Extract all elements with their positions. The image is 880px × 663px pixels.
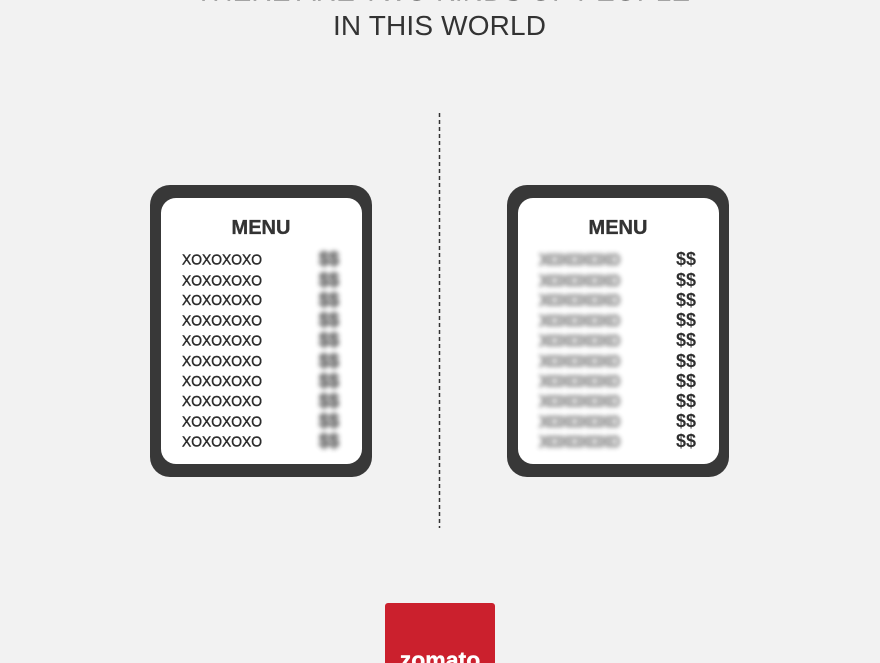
right menu prices: $$ — [676, 431, 696, 451]
right menu blurred items: XOXOXOXO — [540, 252, 620, 268]
left menu items: XOXOXOXO — [182, 393, 262, 410]
right menu blurred items: XOXOXOXO — [540, 292, 620, 309]
right menu blurred items: XOXOXOXO — [540, 353, 620, 370]
left menu blurred prices: $$ — [319, 270, 339, 290]
right menu blurred items: XOXOXOXO — [540, 332, 620, 350]
title: IN THIS WORLD — [333, 10, 546, 41]
left menu items: XOXOXOXO — [182, 312, 262, 330]
right menu blurred items: XOXOXOXO — [540, 373, 620, 390]
left menu items: XOXOXOXO — [182, 373, 262, 390]
left menu items: XOXOXOXO — [182, 414, 262, 430]
right menu prices: $$ — [676, 411, 696, 431]
right menu prices: $$ — [676, 290, 696, 310]
left menu blurred prices — [319, 249, 339, 451]
right menu prices: $$ — [676, 371, 696, 391]
left menu blurred prices: $$ — [319, 351, 339, 371]
panel: left menu — [150, 185, 372, 477]
left menu blurred prices: $$ — [319, 391, 339, 411]
right menu blurred items: XOXOXOXO — [540, 393, 620, 410]
left menu items: XOXOXOXO — [182, 434, 262, 450]
left menu blurred prices: $$ — [319, 249, 339, 269]
left menu heading: MENU — [232, 217, 290, 239]
left menu items: XOXOXOXO — [182, 272, 262, 290]
title — [195, 0, 690, 41]
right menu prices: $$ — [676, 249, 696, 269]
right menu prices: $$ — [676, 270, 696, 290]
left menu items: XOXOXOXO — [182, 292, 262, 309]
right menu blurred items: XOXOXOXO — [540, 272, 620, 290]
left menu items: XOXOXOXO — [182, 252, 262, 268]
right menu blurred items: XOXOXOXO — [540, 312, 620, 330]
right menu prices: $$ — [676, 391, 696, 411]
right menu prices — [676, 249, 696, 451]
panel: right menu — [507, 185, 729, 477]
left menu blurred prices: $$ — [319, 290, 339, 310]
logo: zomato — [385, 603, 495, 663]
right menu blurred items: XOXOXOXO — [540, 414, 620, 430]
left menu items — [182, 252, 262, 450]
right menu blurred items: XOXOXOXO — [540, 434, 620, 450]
left menu blurred prices: $$ — [319, 371, 339, 391]
right menu prices: $$ — [676, 310, 696, 330]
left menu blurred prices: $$ — [319, 310, 339, 330]
right menu frame — [507, 185, 729, 477]
left menu blurred prices: $$ — [319, 431, 339, 451]
left menu blurred prices: $$ — [319, 330, 339, 350]
left menu blurred prices: $$ — [319, 411, 339, 431]
left menu frame — [150, 185, 372, 477]
left menu items: XOXOXOXO — [182, 353, 262, 370]
right menu prices: $$ — [676, 330, 696, 350]
right menu prices: $$ — [676, 351, 696, 371]
right menu heading: MENU — [589, 217, 647, 239]
left menu items: XOXOXOXO — [182, 332, 262, 350]
right menu blurred items — [540, 252, 620, 450]
